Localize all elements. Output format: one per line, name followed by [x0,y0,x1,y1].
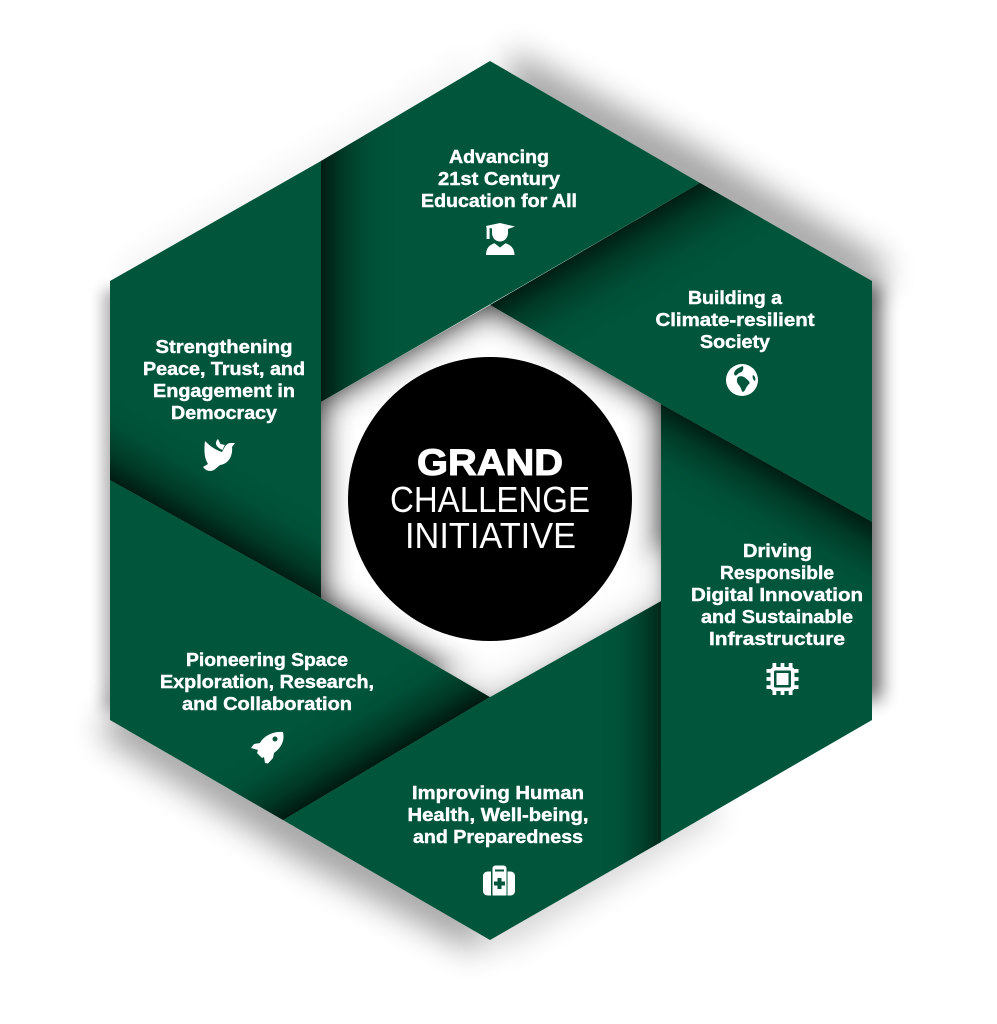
title: Grand Challenge Initiative: INITIATIVE [405,515,576,556]
inner hexagon opening [321,305,661,697]
icon: globe [726,364,758,396]
panel: climate [490,183,872,522]
icon: graduate [486,223,515,255]
icon: dove [203,439,235,471]
label: digital: Driving [743,540,812,561]
outer drop shadow [100,50,886,955]
label: health [408,782,588,847]
centre circle [348,357,632,641]
label: climate: Building a [688,287,783,308]
label: space: and Collaboration [182,693,352,714]
panel: education [321,61,700,402]
label: space: Exploration, Research, [160,671,374,692]
label: climate: Climate-resilient [656,309,814,330]
title: Grand Challenge Initiative: CHALLENGE [390,479,590,520]
label: health: Health, Well-being, [408,804,588,825]
label: democracy: Peace, Trust, and [143,358,305,379]
label: digital: Infrastructure [709,628,845,649]
label: democracy: Democracy [171,402,278,423]
label: democracy: Strengthening [156,336,292,357]
title: Grand Challenge Initiative: GRAND [417,441,563,483]
label: democracy [143,336,305,423]
panel: democracy [110,161,321,598]
label: education: 21st Century [438,168,561,189]
label: health: and Preparedness [413,826,583,847]
title: Grand Challenge Initiative [390,441,590,556]
panel: digital [661,404,872,842]
label: education [421,146,577,211]
label: digital: Digital Innovation [691,584,863,605]
label: digital: and Sustainable [701,606,853,627]
label: digital [691,540,863,649]
label: climate: Society [700,331,771,352]
icon: medical kit [483,866,515,896]
label: democracy: Engagement in [153,380,295,401]
label: education: Advancing [449,146,549,167]
label: health: Improving Human [412,782,584,803]
label: climate [656,287,814,352]
icon: rocket [251,732,284,764]
label: space: Pioneering Space [186,649,348,670]
panel: health [283,601,661,940]
panel: space [110,480,490,820]
label: space [160,649,374,714]
label: digital: Responsible [720,562,834,583]
icon: chip [766,663,798,695]
label: education: Education for All [421,190,577,211]
hexagon ring of six panels [110,61,872,940]
